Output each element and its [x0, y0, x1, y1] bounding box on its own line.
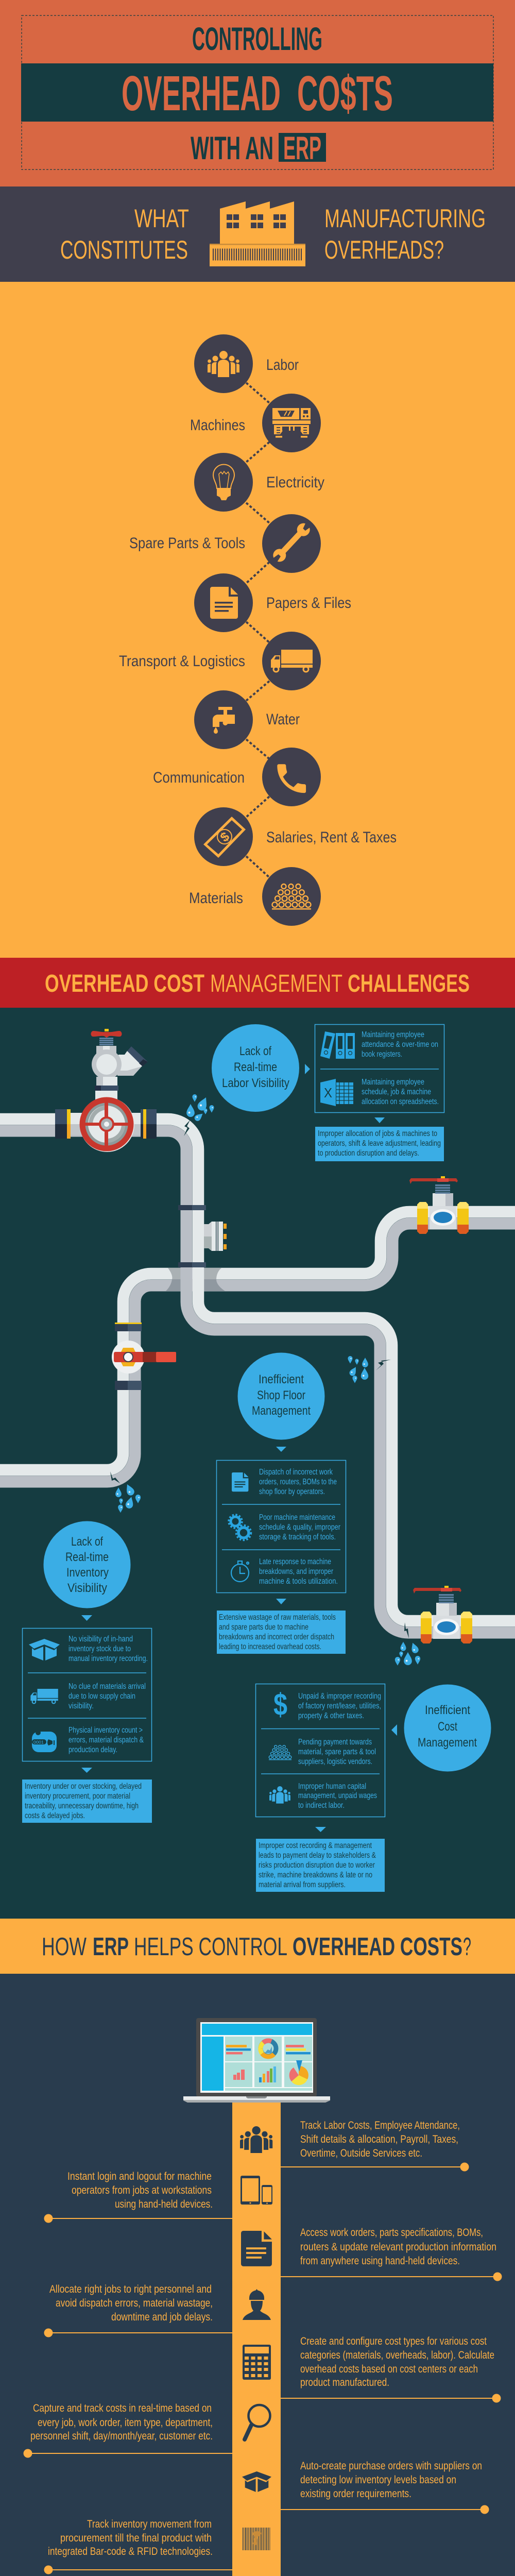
causes text: Dispatch of incorrect work [259, 1468, 333, 1477]
causes text: schedule & quality, improper [259, 1523, 340, 1532]
leader line [44, 2214, 232, 2223]
benefit text [300, 2227, 496, 2267]
erp badge [279, 133, 326, 162]
leader line [281, 2163, 469, 2171]
icon: magnifier [245, 2405, 270, 2439]
result box: leading to increased ovarhead costs. [219, 1642, 321, 1651]
benefit text: Overtime, Outside Services etc. [300, 2147, 422, 2159]
benefit: work orders [241, 2227, 502, 2281]
leader line [281, 2505, 489, 2514]
icon: box [29, 1639, 60, 1660]
causes text: machine & tools utilization. [259, 1577, 338, 1586]
causes text: manual inventory recording. [68, 1654, 148, 1663]
dotted connectors [246, 383, 269, 877]
causes text: allocation on spreadsheets. [362, 1097, 439, 1106]
bubble: Inefficient [425, 1703, 470, 1717]
causes box [255, 1684, 385, 1817]
challenge: inventory visibility [22, 1521, 152, 1823]
leader line [44, 2329, 232, 2337]
panel: erp benefits background [0, 1974, 515, 2576]
dashboard cells [225, 2037, 312, 2091]
label: Labor [266, 357, 299, 374]
icon: box [242, 2471, 271, 2492]
valve: top wheel valve [55, 1029, 157, 1152]
benefit text [300, 2460, 482, 2500]
valve: left lever valve [112, 1323, 176, 1390]
heading text: ERP [93, 1933, 129, 1961]
result box: Extensive wastage of raw materials, tools [219, 1613, 336, 1622]
icon: document [232, 1472, 248, 1492]
result box: Improper cost recording & management [259, 1841, 372, 1850]
erp text: ERP [283, 130, 321, 166]
arrow [81, 1768, 92, 1773]
benefit text [67, 2171, 213, 2210]
causes text: management, unpaid wages [298, 1791, 377, 1800]
causes text: to indirect labor. [298, 1801, 345, 1810]
bar lists [226, 2045, 311, 2055]
causes text: property & other taxes. [298, 1711, 364, 1720]
title block [21, 15, 493, 170]
icon: material pile [269, 1745, 291, 1760]
benefit text: downtime and job delays. [111, 2311, 213, 2323]
causes text [298, 1692, 381, 1810]
causes text: breakdowns, and improper [259, 1567, 333, 1576]
icon: people [208, 351, 239, 377]
bubble: Lack of [239, 1044, 271, 1058]
arrow [315, 1827, 326, 1832]
icon: factory [210, 201, 305, 266]
donut chart [261, 2041, 276, 2057]
arrow [305, 1064, 310, 1074]
item: transport [119, 632, 321, 690]
icon: worker [243, 2289, 271, 2320]
heading band: challenges [0, 958, 515, 1008]
label: Electricity [266, 474, 324, 491]
causes text [362, 1030, 439, 1106]
bubble [404, 1685, 491, 1771]
result box: costs & delayed jobs. [25, 1811, 85, 1820]
label: Salaries, Rent & Taxes [266, 829, 397, 846]
benefit text: product manufactured. [300, 2377, 389, 2388]
benefit text: Instant login and logout for machine [67, 2171, 212, 2182]
result box [315, 1127, 444, 1161]
benefit text: Shift details & allocation, Payroll, Taxes, [300, 2133, 458, 2145]
benefit text: Capture and track costs in real-time based on [33, 2402, 212, 2414]
benefit: allocate jobs [44, 2283, 271, 2337]
result box: Inventory under or over stocking, delayed [25, 1782, 142, 1791]
icon: calculator [243, 2345, 271, 2380]
label: Transport & Logistics [119, 653, 245, 670]
label: Papers & Files [266, 595, 351, 612]
bubble [43, 1521, 131, 1608]
arrow [276, 1599, 286, 1604]
benefit: purchase orders [242, 2460, 489, 2514]
valve: right lower gate valve [413, 1586, 472, 1643]
label: Materials [189, 890, 243, 907]
leak 2 [348, 1356, 391, 1383]
label: Spare Parts & Tools [129, 535, 245, 552]
leak 3 [110, 1471, 141, 1513]
causes text: Maintaining employee [362, 1030, 424, 1039]
icon: document [241, 2231, 272, 2266]
panel: overhead types [0, 282, 515, 958]
item: papers [194, 573, 351, 632]
benefit text: integrated Bar-code & RFID technologies. [48, 2546, 213, 2557]
small bars [233, 2070, 245, 2080]
bubble: Management [252, 1404, 311, 1418]
item: labor [194, 334, 299, 393]
title band [21, 63, 493, 122]
result box [22, 1780, 152, 1823]
icon: spreadsheet: X [324, 1085, 332, 1100]
bubble: Shop Floor [257, 1388, 305, 1402]
benefit text [49, 2283, 213, 2323]
icon: banknote [203, 817, 246, 858]
item: spare parts [129, 514, 321, 573]
heading right [324, 204, 486, 264]
causes box [216, 1460, 346, 1593]
benefit text: using hand-held devices. [115, 2198, 213, 2210]
icon: stopwatch [231, 1561, 249, 1582]
result box: leads to payment delay to stakeholders & [259, 1851, 376, 1860]
icon: document [210, 587, 238, 619]
benefit text [48, 2518, 213, 2557]
icon: material pile [272, 884, 311, 910]
heading text: ? [463, 1933, 471, 1961]
benefit text: detecting low inventory levels based on [300, 2474, 456, 2486]
challenge: cost management [255, 1684, 491, 1892]
icon: faucet [213, 707, 235, 734]
heading band: how erp helps [0, 1919, 515, 1974]
icon: devices [241, 2176, 272, 2205]
benefit text: Auto-create purchase orders with suppliers on [300, 2460, 482, 2472]
result box: to production disruption and delays. [318, 1149, 419, 1158]
result box: strike, machine breakdowns & late or no [259, 1871, 372, 1879]
title line: overhead: OVERHEAD [122, 66, 281, 121]
benefit text: operators from jobs at workstations [72, 2184, 212, 2196]
title line: controlling: CONTROLLING [192, 21, 322, 57]
challenge: labor visibility [212, 1024, 444, 1161]
laptop base [183, 2096, 330, 2103]
arrow [81, 1615, 92, 1621]
bubble: Labor Visibility [222, 1076, 289, 1090]
benefit: instant login [44, 2171, 272, 2223]
benefit text [300, 2335, 494, 2388]
bubble: Cost [438, 1720, 457, 1734]
result box [256, 1839, 385, 1892]
item: salaries [194, 807, 397, 866]
challenge: shop floor [216, 1353, 346, 1654]
benefit text: overhead costs based on cost centers or each [300, 2363, 478, 2375]
heading text: HELPS CONTROL [134, 1933, 287, 1961]
arrow [276, 1447, 286, 1452]
item: machines [190, 394, 321, 452]
causes box [23, 1628, 151, 1761]
leak 1 [184, 1094, 214, 1136]
result box: Improper allocation of jobs & machines to [318, 1129, 437, 1138]
causes text: Pending payment towards [298, 1738, 372, 1747]
bubble [212, 1024, 299, 1112]
causes text: Poor machine maintenance [259, 1513, 335, 1522]
pipe: upper main [0, 1119, 515, 1633]
valve: right upper gate valve [409, 1176, 469, 1234]
icon: scanner counter [32, 1730, 57, 1752]
item: water [194, 690, 300, 749]
leak 4 [395, 1622, 420, 1666]
benefit text: from anywhere using hand-held devices. [300, 2255, 460, 2267]
causes text: attendance & over-time on [362, 1040, 438, 1049]
heading left: WHAT [134, 204, 189, 233]
causes box [315, 1024, 444, 1113]
heading text: CHALLENGES [348, 970, 470, 997]
valve wheel [80, 1097, 134, 1152]
benefit: capture costs [24, 2402, 270, 2458]
column chart [259, 2066, 276, 2082]
causes text: storage & tracking of tools. [259, 1533, 336, 1541]
item: materials [189, 867, 321, 926]
causes text: schedule, job & machine [362, 1088, 431, 1096]
causes text: Physical inventory count > [68, 1726, 143, 1735]
result box: and spare parts due to machine [219, 1623, 308, 1632]
bubble: Lack of [71, 1535, 103, 1549]
panel: what constitutes heading [0, 187, 515, 282]
item: electricity [194, 453, 324, 512]
benefit text: every job, work order, item type, department, [38, 2417, 213, 2429]
icon: barcode [243, 2531, 271, 2546]
icon: people [269, 1786, 290, 1804]
icon: gears [229, 1515, 251, 1540]
causes text: due to low supply chain [68, 1692, 135, 1701]
icon: light bulb [213, 465, 234, 500]
causes text [259, 1468, 340, 1586]
causes text: Unpaid & improper recording [298, 1692, 381, 1701]
orange funnel column [224, 2103, 290, 2576]
benefit: labor costs [240, 2120, 469, 2171]
valve flanges [55, 1109, 157, 1139]
icon: phone [277, 764, 306, 793]
icon: spreadsheet [320, 1079, 353, 1106]
arrow [391, 1724, 397, 1736]
benefit text: avoid dispatch errors, material wastage, [56, 2297, 213, 2309]
title line: costs: CO$TS [297, 66, 393, 121]
bubble: Inventory [66, 1566, 109, 1580]
causes text: suppliers, logistic vendors. [298, 1757, 372, 1766]
benefit text: existing order requirements. [300, 2488, 411, 2500]
causes text: visibility. [68, 1702, 94, 1710]
label: Machines [190, 417, 245, 434]
panel: challenges background [0, 1008, 515, 1919]
causes text: errors, material dispatch & [68, 1736, 144, 1744]
bubble: Inefficient [259, 1372, 304, 1386]
leader line [24, 2449, 232, 2458]
heading text: HOW [42, 1933, 87, 1961]
causes text: inventory stock due to [68, 1645, 131, 1653]
title line: with an: WITH AN [191, 130, 273, 166]
result box: risks production disruption due to worker [259, 1861, 375, 1870]
icon: dollar: $ [273, 1687, 287, 1722]
heading text: MANAGEMENT [210, 970, 342, 997]
bubble [238, 1353, 324, 1439]
icon: wrench [269, 519, 314, 566]
icon: people [240, 2126, 272, 2153]
benefit: cost types [243, 2335, 501, 2403]
label: Communication [153, 769, 245, 786]
benefit text: Track inventory movement from [87, 2518, 212, 2530]
heading text: OVERHEAD COST [45, 970, 204, 997]
icon: truck [30, 1689, 58, 1703]
bubble: Visibility [67, 1581, 107, 1595]
icon: truck [271, 650, 313, 672]
icon: machine [272, 408, 311, 438]
benefit: track inventory [44, 2518, 271, 2574]
causes text: No clue of materials arrival [68, 1682, 146, 1691]
causes text: book registers. [362, 1050, 402, 1059]
label: Water [266, 711, 300, 728]
heading text [45, 970, 470, 997]
icon: binders [320, 1031, 355, 1059]
result box [217, 1611, 346, 1654]
benefit text: procurement till the final product with [60, 2532, 212, 2544]
result box: operators, shift & leave adjustment, leading [318, 1139, 441, 1148]
pipe fitting: t-branch with bolts [204, 1222, 227, 1251]
pipe: crossing shadow [166, 1268, 225, 1291]
benefit text: personnel shift, day/month/year, customer etc. [30, 2430, 213, 2442]
bubble: Real-time [234, 1060, 277, 1074]
causes text: Improper human capital [298, 1782, 366, 1791]
icon: banknote: $ [217, 829, 232, 845]
heading left: CONSTITUTES [60, 235, 188, 264]
benefit text [30, 2402, 213, 2442]
causes text: production delay. [68, 1745, 117, 1754]
background: header panel [0, 0, 515, 187]
causes text: material, spare parts & tool [298, 1748, 376, 1756]
result box: traceability, unnecessary downtime, high [25, 1802, 139, 1810]
heading text [42, 1933, 471, 1961]
valve handle [91, 1029, 122, 1045]
arrow [374, 1117, 385, 1123]
causes text: of factory rent/lease, utilities, [298, 1702, 381, 1710]
benefit text: Track Labor Costs, Employee Attendance, [300, 2120, 460, 2131]
pie chart [289, 2060, 308, 2085]
leader line [281, 2272, 502, 2281]
result box: breakdowns and incorrect order dispatch [219, 1633, 334, 1641]
heading right: OVERHEADS? [324, 235, 444, 264]
result box: material arrival from suppliers. [259, 1880, 346, 1889]
result box: inventory procurement, poor material [25, 1792, 130, 1801]
causes text: Late response to machine [259, 1557, 331, 1566]
causes text: shop floor by operators. [259, 1487, 325, 1496]
pipe: lower branch [0, 1212, 515, 1482]
causes text [68, 1635, 148, 1754]
pipe collars [178, 1205, 206, 1267]
heading left [60, 204, 189, 264]
bubble: Real-time [65, 1550, 109, 1564]
bubble: Management [418, 1736, 477, 1750]
pipe network [0, 1119, 515, 1633]
icon: scanner counter: 0001 [33, 1740, 44, 1744]
laptop dashboard [183, 2018, 330, 2103]
leader line [281, 2394, 501, 2403]
benefit text [300, 2120, 460, 2159]
valve body [92, 1046, 148, 1104]
benefit text: Allocate right jobs to right personnel and [49, 2283, 212, 2295]
causes text: No visibility of in-hand [68, 1635, 133, 1643]
item: communication [153, 748, 321, 806]
causes text: orders, routers, BOMs to the [259, 1478, 337, 1486]
causes text: Maintaining employee [362, 1078, 424, 1087]
leader line [44, 2566, 232, 2574]
